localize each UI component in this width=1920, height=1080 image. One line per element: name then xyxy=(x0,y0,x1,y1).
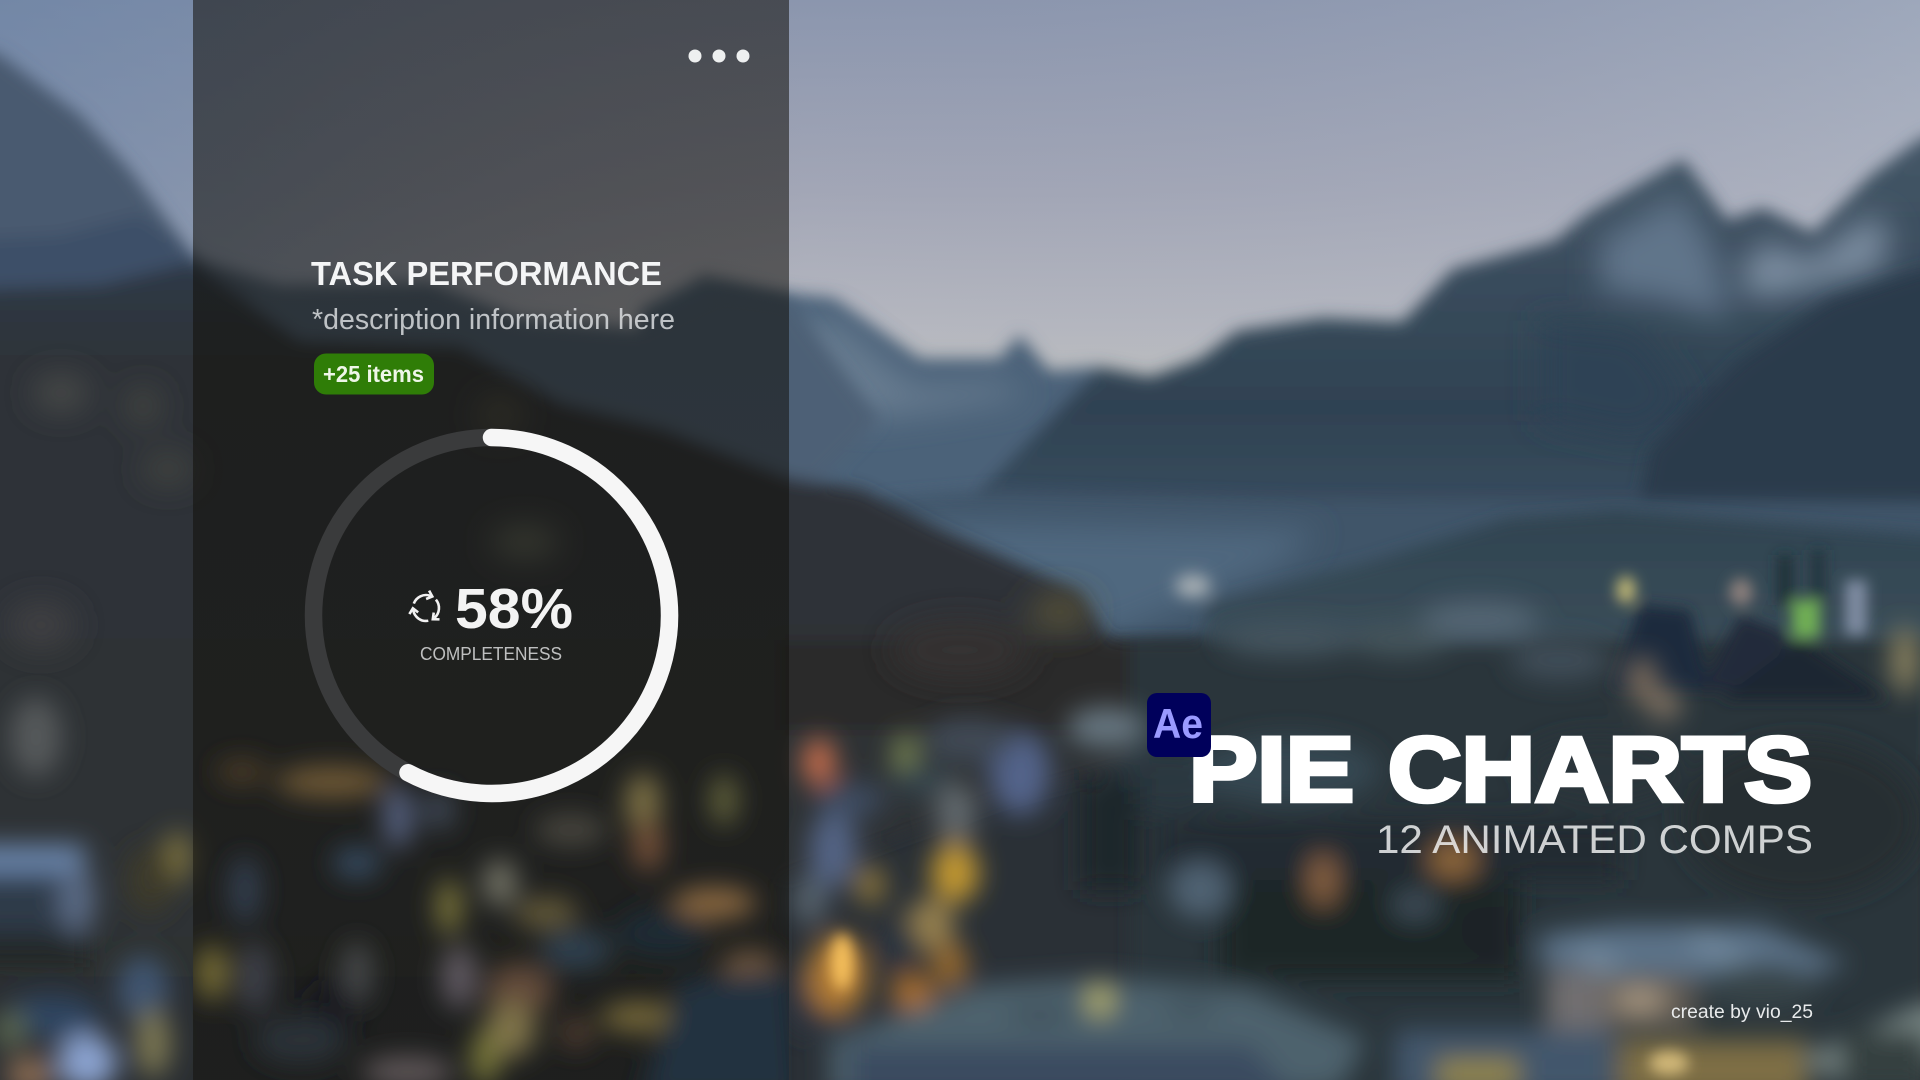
bright lights xyxy=(831,934,1689,1075)
title: pie charts xyxy=(1189,719,1812,821)
subtitle: 12 animated comps: 12 ANIMATED COMPS xyxy=(1376,818,1813,862)
title: pie charts: PIE xyxy=(1189,719,1354,821)
panel: translucent dark column xyxy=(193,0,789,1080)
middle town xyxy=(990,731,1050,815)
credit text: create by vio_25 xyxy=(1671,1002,1813,1023)
label: completeness: COMPLETENESS xyxy=(420,644,562,664)
icon: after effects badge xyxy=(1147,693,1211,757)
icon: three dots menu xyxy=(688,50,750,62)
title: pie charts: CHARTS xyxy=(1388,719,1812,821)
badge: +25 items: +25 items xyxy=(323,361,424,387)
far left xyxy=(10,697,62,777)
description text: *description information here xyxy=(312,304,675,336)
chart: 58% progress ring xyxy=(314,438,670,794)
town upper right xyxy=(1610,605,1710,690)
bottom roofs xyxy=(830,977,1366,1080)
panel town lights seen through glass xyxy=(196,759,800,1080)
badge: +25 items xyxy=(314,354,434,394)
left orange lights xyxy=(803,738,835,786)
value: 58%: 58% xyxy=(455,577,573,641)
icon: after effects badge: Ae xyxy=(1153,700,1203,747)
heading: task performance: TASK PERFORMANCE xyxy=(311,255,662,292)
icon: circular arrows xyxy=(408,591,447,627)
